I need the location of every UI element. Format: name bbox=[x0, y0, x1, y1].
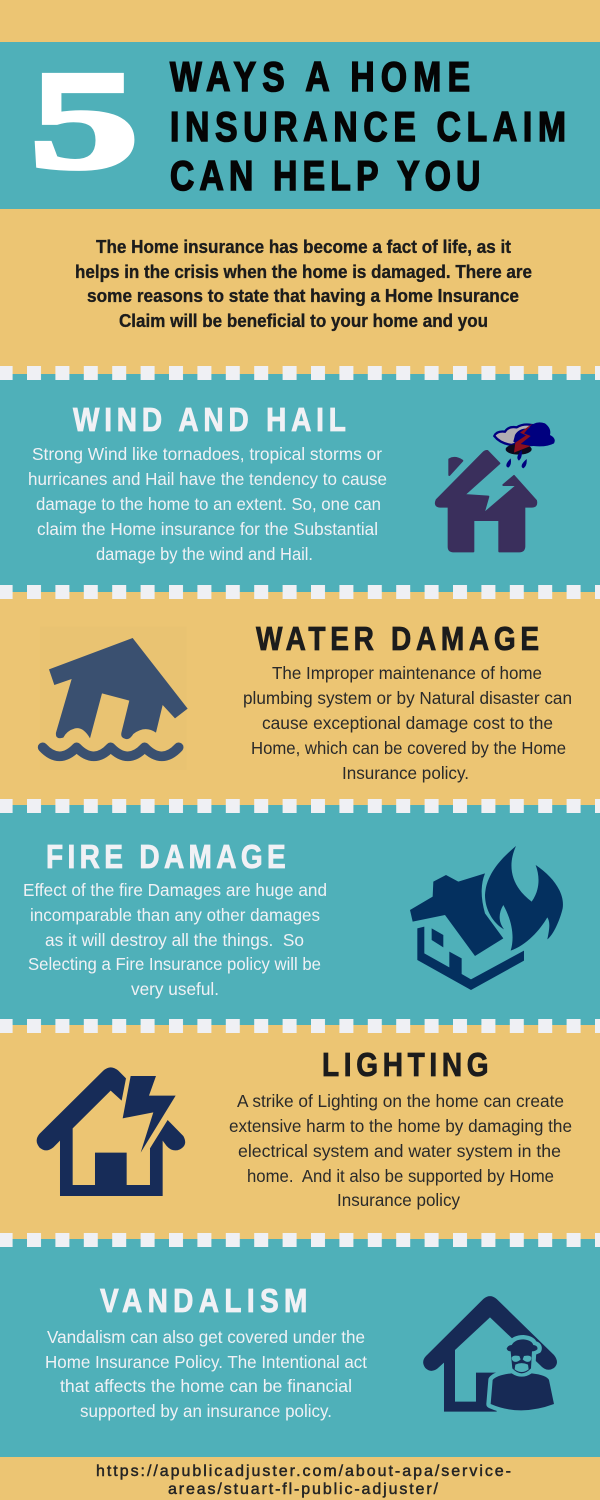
text: wind and hail bbox=[28, 444, 387, 564]
text: wind and hail: hurricanes and Hail have the tendency to cause bbox=[28, 469, 387, 489]
intro text: some reasons to state that having a Home Insurance bbox=[87, 285, 519, 306]
text: lighting bbox=[229, 1091, 572, 1210]
panel: vandalism bbox=[45, 1283, 557, 1421]
text: fire damage: Effect of the fire Damages are huge and bbox=[23, 880, 327, 900]
text: fire damage bbox=[23, 880, 327, 999]
text: water damage: cause exceptional damage cost to the bbox=[262, 713, 553, 733]
heading: wind and hail: WIND AND HAIL bbox=[73, 402, 346, 439]
intro text: The Home insurance has become a fact of life, as it bbox=[96, 236, 511, 257]
footer url: areas/stuart-fl-public-adjuster/ bbox=[168, 1481, 439, 1498]
heading: vandalism: VANDALISM bbox=[100, 1283, 307, 1320]
text: water damage: Insurance policy. bbox=[342, 763, 469, 783]
text: lighting: extensive harm to the home by damaging the bbox=[229, 1116, 572, 1136]
text: fire damage: very useful. bbox=[131, 979, 219, 999]
title: INSURANCE CLAIM bbox=[170, 105, 566, 151]
text: vandalism: supported by an insurance policy. bbox=[80, 1401, 332, 1421]
text: lighting: home. And it also be supported by Home bbox=[247, 1166, 554, 1186]
icon: house struck by lightning bbox=[37, 1067, 185, 1196]
text: wind and hail: damage by the wind and Hail. bbox=[96, 544, 313, 564]
text: wind and hail: claim the Home insurance for the Substantial bbox=[37, 519, 378, 539]
footer url bbox=[96, 1463, 511, 1498]
icon: house on fire bbox=[410, 846, 563, 990]
text: wind and hail: Strong Wind like tornadoes, tropical storms or bbox=[32, 444, 382, 464]
panel: fire damage bbox=[23, 839, 563, 999]
text: lighting: Insurance policy bbox=[337, 1190, 460, 1210]
text: lighting: electrical system and water system in the bbox=[238, 1141, 561, 1161]
panel: lighting bbox=[37, 1047, 572, 1210]
panel: wind and hail bbox=[28, 402, 555, 564]
text: wind and hail: damage to the home to an extent. So, one can bbox=[36, 494, 381, 514]
text: water damage bbox=[243, 663, 572, 783]
text: vandalism bbox=[45, 1327, 367, 1421]
numeral 5: 5 bbox=[30, 43, 138, 198]
heading: water damage: WATER DAMAGE bbox=[256, 621, 539, 658]
title bbox=[170, 55, 566, 200]
heading: lighting: LIGHTING bbox=[322, 1047, 489, 1084]
text: vandalism: Home Insurance Policy. The Intentional act bbox=[45, 1352, 367, 1372]
text: fire damage: as it will destroy all the things. So bbox=[45, 930, 304, 950]
panel: water damage bbox=[40, 621, 572, 783]
footer url: https://apublicadjuster.com/about-apa/service- bbox=[96, 1463, 511, 1480]
title: CAN HELP YOU bbox=[170, 154, 480, 200]
text: fire damage: incomparable than any other damages bbox=[30, 905, 320, 925]
heading: fire damage: FIRE DAMAGE bbox=[46, 839, 286, 876]
intro text bbox=[75, 236, 532, 331]
text: vandalism: that affects the home can be financial bbox=[60, 1376, 352, 1396]
text: water damage: Home, which can be covered by the Home bbox=[251, 738, 566, 758]
text: water damage: The Improper maintenance of home bbox=[272, 663, 542, 683]
text: fire damage: Selecting a Fire Insurance policy will be bbox=[28, 954, 321, 974]
intro text: helps in the crisis when the home is damaged. There are bbox=[75, 261, 532, 282]
intro text: Claim will be beneficial to your home and you bbox=[119, 310, 488, 331]
text: lighting: A strike of Lighting on the home can create bbox=[237, 1091, 564, 1111]
text: vandalism: Vandalism can also get covered under the bbox=[47, 1327, 365, 1347]
text: water damage: plumbing system or by Natural disaster can bbox=[243, 688, 572, 708]
icon: burglar at house bbox=[423, 1296, 557, 1412]
icon: storm house bbox=[436, 422, 555, 551]
title: WAYS A HOME bbox=[170, 55, 470, 101]
icon: flooded house bbox=[40, 627, 188, 770]
